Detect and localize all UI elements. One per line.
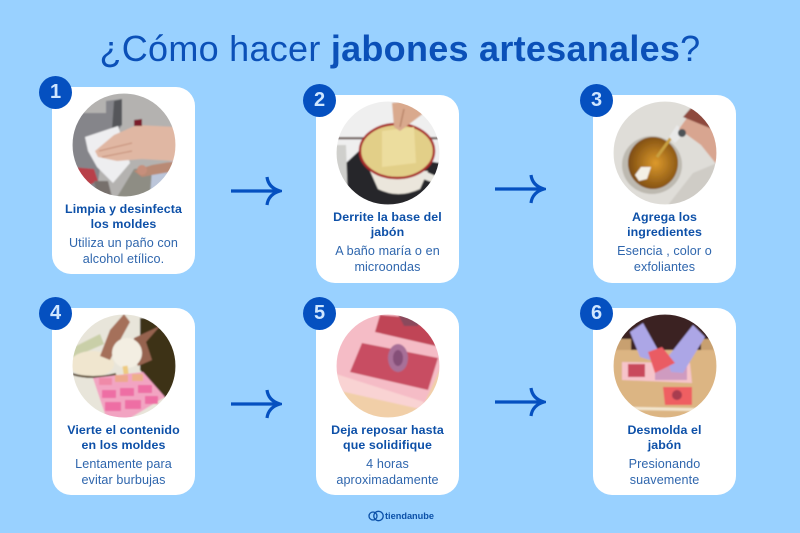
heading: jabón xyxy=(648,438,681,452)
heading xyxy=(65,202,182,231)
description: suavemente xyxy=(630,472,699,486)
heading xyxy=(333,210,442,239)
heading: Desmolda el xyxy=(627,423,702,437)
heading xyxy=(627,423,702,452)
panel: step 1 xyxy=(52,87,195,274)
brand name: tiendanube xyxy=(385,511,434,521)
panel: step 3 xyxy=(593,95,736,283)
heading xyxy=(67,423,180,452)
heading: que solidifique xyxy=(343,438,432,452)
panel: step 2 xyxy=(316,95,459,283)
heading: Deja reposar hasta xyxy=(331,423,444,437)
icon: cloud xyxy=(368,510,384,522)
badge 6 xyxy=(580,297,613,330)
photo: melting the soap base xyxy=(336,102,440,204)
description xyxy=(629,457,700,486)
badge 4: 4 xyxy=(50,302,61,324)
arrow 5 to 6 xyxy=(495,388,546,416)
description xyxy=(69,236,178,266)
description: Presionando xyxy=(629,457,700,471)
description: A baño maría o en xyxy=(335,244,440,258)
heading: Derrite la base del xyxy=(333,210,442,224)
logo: tiendanube xyxy=(368,510,434,522)
panel: step 6 xyxy=(593,308,736,495)
title: ¿Cómo hacer jabones artesanales? xyxy=(100,28,700,69)
heading: Agrega los xyxy=(632,210,697,224)
badge 1 xyxy=(39,76,72,109)
photo: pouring into moulds xyxy=(72,314,176,418)
description: 4 horas xyxy=(366,457,409,471)
photo: adding ingredients xyxy=(614,102,716,204)
heading: los moldes xyxy=(91,217,156,231)
heading: jabón xyxy=(371,225,404,239)
arrow 1 to 2 xyxy=(231,176,282,206)
badge 5: 5 xyxy=(314,302,325,324)
badge 2: 2 xyxy=(314,89,325,111)
description: Esencia , color o xyxy=(617,244,712,258)
arrow 2 to 3 xyxy=(495,174,546,204)
photo: unmoulding soap xyxy=(614,314,716,418)
description: Utiliza un paño con xyxy=(69,236,178,250)
description: aproximadamente xyxy=(336,472,439,486)
heading: Vierte el contenido xyxy=(67,423,180,437)
description: evitar burbujas xyxy=(81,472,166,486)
description xyxy=(335,244,440,274)
badge 1: 1 xyxy=(50,81,61,103)
description xyxy=(75,457,172,486)
heading xyxy=(331,423,444,452)
badge 6: 6 xyxy=(591,302,602,324)
photo: resting soap xyxy=(336,314,440,418)
heading: ingredientes xyxy=(627,225,702,239)
description: alcohol etílico. xyxy=(83,252,164,266)
badge 2 xyxy=(303,84,336,117)
badge 4 xyxy=(39,297,72,330)
description: exfoliantes xyxy=(634,260,695,274)
panel: step 5 xyxy=(316,308,459,495)
arrow 4 to 5 xyxy=(231,390,282,418)
description xyxy=(336,457,439,486)
description: Lentamente para xyxy=(75,457,172,471)
badge 3 xyxy=(580,84,613,117)
photo: cleaning the mould xyxy=(72,94,176,196)
badge 5 xyxy=(303,297,336,330)
heading: Limpia y desinfecta xyxy=(65,202,182,216)
description xyxy=(617,244,712,274)
panel: step 4 xyxy=(52,308,195,495)
heading: en los moldes xyxy=(82,438,165,452)
description: microondas xyxy=(354,260,421,274)
heading xyxy=(627,210,702,239)
badge 3: 3 xyxy=(591,89,602,111)
